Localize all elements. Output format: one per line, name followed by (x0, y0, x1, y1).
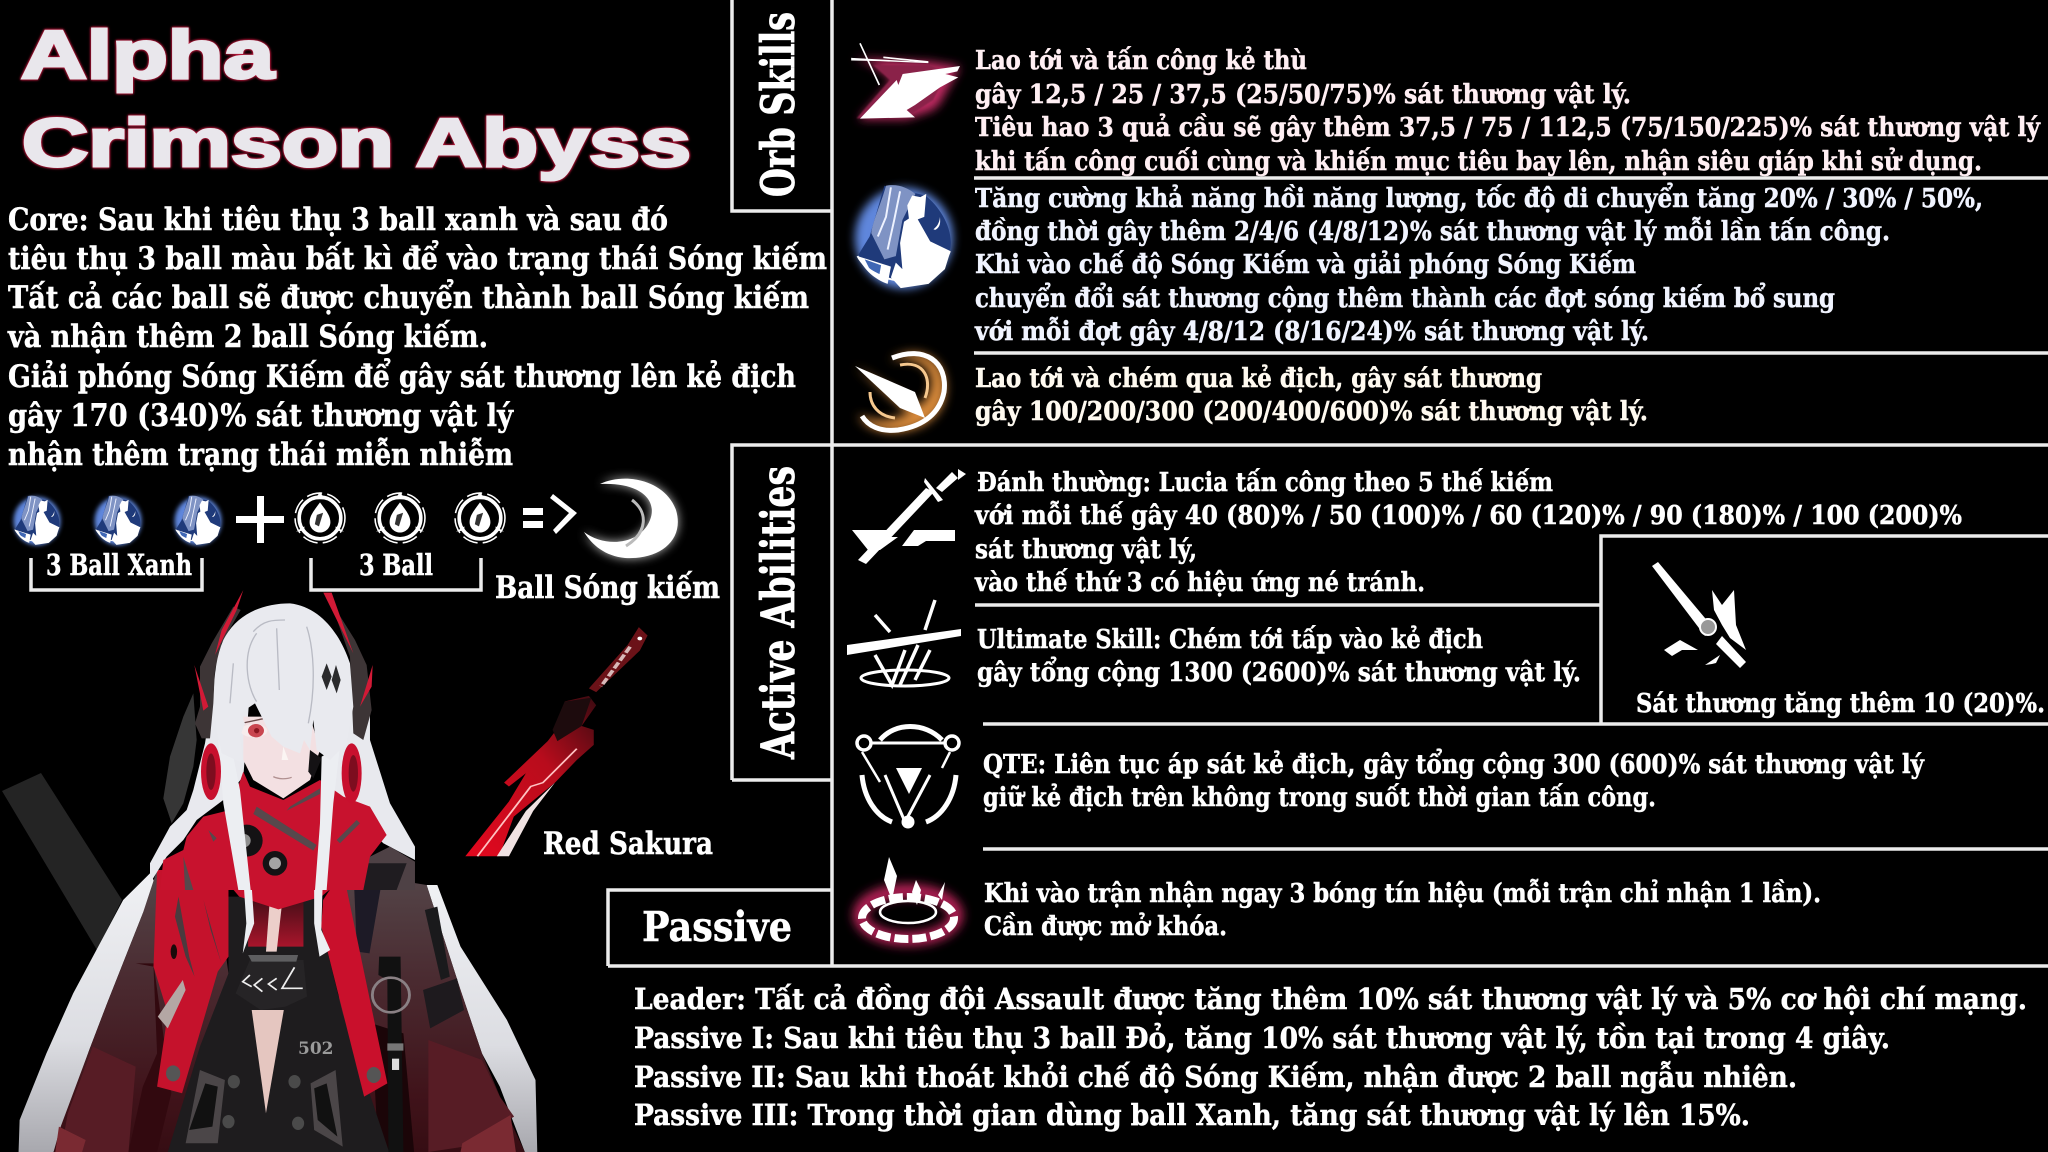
text block: orb skill 3: Lao tới và chém qua kẻ địch, gây sát thương (975, 364, 1542, 394)
text block: core description (7, 202, 827, 473)
text block: basic attack (974, 467, 1962, 598)
text block: core description: gây 170 (340)% sát thương vật lý (8, 398, 514, 434)
orb formula row (14, 479, 678, 558)
text block: QTE: giữ kẻ địch trên không trong suốt thời gian tấn công. (983, 782, 1656, 813)
character illustration (2, 590, 537, 1152)
icon: small blade with sparks (1652, 562, 1746, 668)
text block: orb skill 3 (975, 364, 1648, 427)
back weapon bar (2, 773, 122, 950)
text block: core description: và nhận thêm 2 ball Sóng kiếm. (7, 318, 488, 355)
text block: core description: tiêu thụ 3 ball màu bất kì để vào trạng thái Sóng kiếm (8, 238, 827, 277)
character illustration: 502 (298, 1039, 334, 1059)
text block: orb skill 2: chuyển đổi sát thương cộng thêm thành các đợt sóng kiếm bổ sung (975, 282, 1835, 314)
label: 3 Ball Xanh with bracket (31, 548, 202, 590)
text block: core description: Core: Sau khi tiêu thụ 3 ball xanh và sau đó (8, 202, 668, 238)
text block: ultimate (977, 624, 1581, 688)
icon: three blue orbs (14, 496, 221, 545)
label: 3 Ball Xanh with bracket: 3 Ball Xanh (46, 548, 192, 582)
text block: passive unlock: Khi vào trận nhận ngay 3 bóng tín hiệu (mỗi trận chỉ nhận 1 lần). (984, 878, 1821, 909)
heading: Passive: Passive (642, 903, 792, 951)
text block: core description: nhận thêm trạng thái miễn nhiễm (8, 436, 513, 473)
text block: ultimate: gây tổng cộng 1300 (2600)% sát thương vật lý. (977, 656, 1581, 688)
text block: orb skill 1: Lao tới và tấn công kẻ thù (975, 45, 1307, 76)
icon: ultimate crossed blades (847, 600, 961, 686)
label: Red Sakura: Red Sakura (543, 826, 713, 862)
text block: orb skill 2: với mỗi đợt gây 4/8/12 (8/16/24)% sát thương vật lý. (974, 316, 1649, 347)
text block: orb skill 2: Khi vào chế độ Sóng Kiếm và giải phóng Sóng Kiếm (975, 249, 1636, 280)
text block: orb skill 3: gây 100/200/300 (200/400/600)% sát thương vật lý. (975, 397, 1648, 427)
icon: blue spirit orb (855, 185, 953, 289)
text block: leader and passives (634, 982, 2027, 1132)
text block: basic attack: sát thương vật lý, (975, 535, 1197, 565)
label: 3 Ball with bracket: 3 Ball (359, 548, 433, 582)
text block: basic attack: Đánh thường: Lucia tấn công theo 5 thế kiếm (977, 467, 1553, 498)
text block: passive unlock: Cần được mở khóa. (984, 912, 1227, 942)
text block: orb skill 2 (974, 182, 1983, 347)
icon: pink dash slash (852, 43, 960, 119)
weapon illustration (465, 627, 648, 856)
text block: QTE: QTE: Liên tục áp sát kẻ địch, gây tổng cộng 300 (600)% sát thương vật lý (983, 748, 1925, 780)
title (21, 17, 691, 181)
text block: QTE (983, 748, 1925, 813)
text block: passive unlock (984, 878, 1821, 942)
text block: leader and passives: Passive III: Trong thời gian dùng ball Xanh, tăng sát thương vật lý lên 15%. (634, 1098, 1750, 1132)
text block: orb skill 2: đồng thời gây thêm 2/4/6 (4/8/12)% sát thương vật lý mỗi lần tấn công. (975, 216, 1890, 247)
title: Crimson Abyss (22, 105, 691, 181)
text block: core description: Giải phóng Sóng Kiếm để gây sát thương lên kẻ địch (8, 356, 796, 395)
heading: Active Abilities: Active Abilities (751, 466, 805, 760)
text block: core description: Tất cả các ball sẽ được chuyển thành ball Sóng kiếm (8, 277, 809, 316)
icon: crescent wave orb (584, 479, 678, 558)
icon: golden slash (855, 353, 946, 432)
title: Alpha (21, 17, 276, 93)
label: Ball Sóng kiếm: Ball Sóng kiếm (495, 569, 720, 606)
icon: passive crystal ring (860, 857, 956, 939)
frame lines (608, 0, 2048, 966)
text block: basic attack: với mỗi thế gây 40 (80)% / 50 (100)% / 60 (120)% / 90 (180)% / 100 (200)% (974, 500, 1962, 531)
icon: three black orbs (295, 492, 505, 543)
icon: plus sign (236, 496, 284, 543)
icon: basic attack sword (852, 469, 966, 564)
text block: leader and passives: Passive I: Sau khi tiêu thụ 3 ball Đỏ, tăng 10% sát thương vật lý, tồn tại trong 4 giây. (634, 1021, 1890, 1055)
label: 3 Ball with bracket (311, 548, 481, 590)
text block: orb skill 1 (975, 45, 2041, 177)
text block: leader and passives: Passive II: Sau khi thoát khỏi chế độ Sóng Kiếm, nhận được 2 ball ngẫu nhiên. (634, 1060, 1797, 1094)
text block: orb skill 1: gây 12,5 / 25 / 37,5 (25/50/75)% sát thương vật lý. (975, 80, 1631, 110)
text block: ultimate: Ultimate Skill: Chém tới tấp vào kẻ địch (977, 624, 1483, 655)
icon: QTE triangle emblem (857, 726, 959, 828)
text block: basic attack: vào thế thứ 3 có hiệu ứng né tránh. (974, 567, 1425, 598)
icon: equals arrow (523, 494, 577, 534)
panel: bonus damage (1636, 562, 2045, 719)
